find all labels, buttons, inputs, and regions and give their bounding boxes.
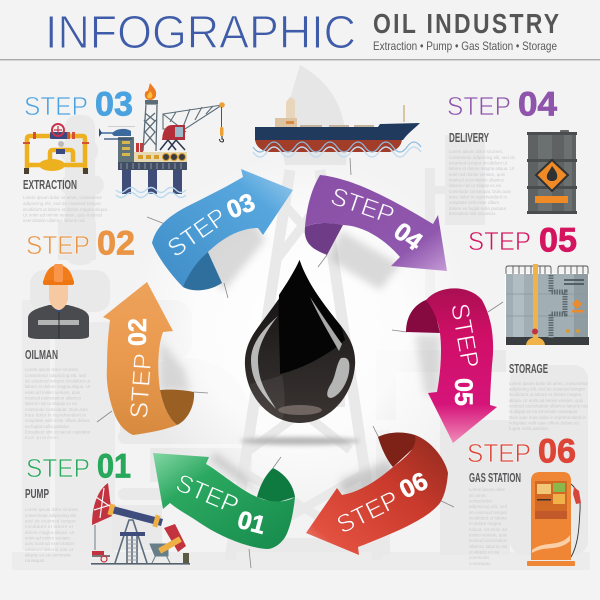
text block: gas station <box>469 487 508 566</box>
text block: pump: quis nostrud exercitation <box>25 541 75 546</box>
text block: oilman: consectetur adipiscing elit, sed <box>25 373 87 378</box>
background derrick lattice <box>230 170 378 560</box>
label: 05 <box>449 378 477 406</box>
icon: pumpjack <box>91 483 190 565</box>
text block: delivery: voluptate velit esse cillum <box>449 200 499 205</box>
text block: gas station: consequat. <box>469 561 491 566</box>
step 03 heading: STEP <box>24 91 88 121</box>
central white glow <box>125 155 475 505</box>
text block: oilman: labore et dolore magna aliqua. Ut <box>25 384 91 389</box>
text block: gas station: incididunt ut labore <box>469 516 508 520</box>
label: gas station: GAS STATION <box>469 470 521 485</box>
icon: storage tank <box>505 264 589 345</box>
step 03 heading: 03 <box>95 86 133 124</box>
label: pump: PUMP <box>25 486 49 501</box>
icon: oil barrel <box>527 130 577 214</box>
step 02 heading: 02 <box>97 224 135 262</box>
text block: gas station: adipiscing elit, sed <box>469 504 508 509</box>
text block: extraction: adipiscing elit, sed do eiusmod tempor <box>23 201 102 206</box>
text block: pump <box>25 507 79 563</box>
text block: storage: nostrud exercitation ullamco laboris nisi <box>509 404 588 408</box>
text block: oilman: do eiusmod tempor incididunt ut <box>25 378 91 384</box>
text block: pump: Lorem ipsum dolor sit amet, <box>25 507 79 512</box>
text block: extraction <box>23 195 108 223</box>
label: STEP <box>172 469 243 520</box>
text block: oilman: nostrud exercitation ullamco <box>25 396 82 400</box>
text block: pump: consequat. <box>25 558 45 563</box>
label: 01 <box>234 506 269 540</box>
text block: pump: incididunt ut labore et <box>25 524 74 529</box>
label: 06 <box>395 467 433 504</box>
text block: delivery: consectetur adipiscing elit, sed do <box>449 155 516 160</box>
text block: storage: aliqua. Ut enim ad minim veniam, quis <box>509 398 584 403</box>
title: infographic: INFOGRAPHIC <box>45 6 356 58</box>
step 04 heading: STEP <box>447 91 511 121</box>
arrow: step 03 <box>147 169 293 298</box>
text block: oilman: eu fugiat nulla pariatur. <box>25 424 70 429</box>
step 02 heading <box>26 224 135 262</box>
step 06 heading <box>467 432 576 470</box>
label: STEP <box>332 486 403 539</box>
label: 04 <box>388 217 428 256</box>
text block: pump: dolore magna aliqua. Ut <box>25 530 75 535</box>
icon: fuel pump <box>527 472 581 566</box>
arrow: step 04 <box>305 158 447 290</box>
text block: delivery <box>449 149 516 216</box>
label <box>124 318 158 419</box>
text block: delivery: Lorem ipsum dolor sit amet, <box>449 149 503 154</box>
title: oil industry: OIL INDUSTRY <box>373 9 559 40</box>
text block: storage: Lorem ipsum dolor sit amet, consectetur <box>509 381 589 386</box>
label: STEP <box>327 182 398 230</box>
oil drop <box>240 260 360 445</box>
text block: pump: aliquip ex ea commodo <box>25 552 72 558</box>
text block: gas station: minim veniam, quis <box>469 532 508 538</box>
text block: delivery: dolore eu fugiat nulla pariatur. <box>449 206 507 211</box>
text block: storage: adipiscing elit, sed do eiusmod tempor <box>509 386 586 392</box>
text block: gas station: et dolore magna <box>469 521 502 526</box>
text block: oilman: enim ad minim veniam, quis <box>25 390 81 395</box>
label: STEP <box>162 203 232 263</box>
text block: gas station: ullamco laboris nisi <box>469 544 507 549</box>
text block: delivery: Excepteur sint occaecat. <box>449 211 496 216</box>
text block: delivery: eiusmod tempor incididunt ut <box>449 160 508 166</box>
text block: delivery: irure dolor in reprehenderit in <box>449 194 508 200</box>
step 05 heading: STEP <box>468 226 531 256</box>
text block: storage: incididunt ut labore et dolore magna <box>509 392 582 397</box>
text block: storage <box>509 381 589 431</box>
panel: step 01 pump <box>25 448 190 565</box>
text block: oilman: irure dolor in reprehenderit in <box>25 412 87 418</box>
text block: gas station: ut aliquip ex ea <box>469 550 500 554</box>
text block: extraction: incididunt ut labore et dolore magna aliqua. <box>23 207 108 212</box>
step 06 heading: STEP <box>467 438 531 468</box>
text block: storage: Duis aute irure dolor in reprehenderit in <box>509 415 587 420</box>
icon: oil platform <box>99 83 225 198</box>
text block: extraction: Lorem ipsum dolor sit amet, consectetur <box>23 195 103 200</box>
step 05 heading: 05 <box>539 222 577 260</box>
label: storage: STORAGE <box>509 361 548 376</box>
panel: step 06 gas station <box>467 432 581 566</box>
panel: ship <box>253 97 421 157</box>
text block: pump: consectetur adipiscing elit, <box>25 513 77 518</box>
text block: storage: ut aliquip ex ea commodo consequat. <box>509 409 578 414</box>
text block: pump: ullamco laboris nisi ut <box>25 547 74 552</box>
panel: step 03 extraction <box>23 83 225 223</box>
text block: gas station: commodo <box>469 555 490 560</box>
step 01 heading: STEP <box>26 453 90 483</box>
text block: gas station: Lorem ipsum dolor <box>469 487 506 492</box>
text block: gas station: aliqua. Ut enim ad <box>469 527 508 532</box>
text block: gas station: do eiusmod tempor <box>469 510 508 515</box>
subtitle: Extraction • Pump • Gas Station • Storage <box>373 39 557 53</box>
text block: oilman: non proident. <box>25 435 60 440</box>
text block: pump: enim ad minim veniam, <box>25 536 71 540</box>
step 04 heading: 04 <box>518 86 557 124</box>
text block: extraction: Ut enim ad minim veniam, quis nostrud <box>23 212 103 218</box>
text block: gas station: sit amet, <box>469 493 487 498</box>
arrow: step 02 <box>97 282 208 435</box>
text block: oilman: voluptate velit esse cillum dolore <box>25 418 91 423</box>
text block: delivery: nostrud exercitation ullamco <box>449 178 505 182</box>
panel: step 04 delivery <box>447 86 577 216</box>
text block: delivery: commodo consequat. Duis aute <box>449 189 512 194</box>
label <box>332 467 433 539</box>
step 06 heading: 06 <box>538 432 576 470</box>
label: 02 <box>124 318 152 346</box>
label: delivery: DELIVERY <box>449 130 489 145</box>
text block: gas station: nostrud exercitation <box>469 538 508 543</box>
step 02 heading: STEP <box>26 230 90 260</box>
icon: oilman <box>28 264 89 339</box>
label <box>445 301 484 406</box>
label: oilman: OILMAN <box>25 348 58 362</box>
label <box>327 182 428 256</box>
text block: storage: voluptate velit esse cillum dolore eu <box>509 420 580 426</box>
label: STEP <box>445 301 484 370</box>
text block: oilman <box>25 367 91 440</box>
step 05 heading <box>468 222 577 260</box>
label <box>172 469 269 540</box>
label <box>162 188 259 263</box>
text block: delivery: labore et dolore magna aliqua. Ut <box>449 166 515 171</box>
label: 03 <box>223 188 259 225</box>
panel: step 05 storage <box>468 222 589 431</box>
arrow: step 05 <box>392 288 503 443</box>
icon: pipes <box>23 124 89 174</box>
text block: oilman: laboris nisi ut aliquip ex ea <box>25 401 78 406</box>
arrow: step 01 <box>153 452 295 568</box>
text block: pump: sed do eiusmod tempor <box>25 518 77 524</box>
step 03 heading <box>24 86 133 124</box>
text block: oilman: Excepteur sint occaecat cupidatat <box>25 430 91 434</box>
step 01 heading <box>26 448 131 486</box>
header divider <box>0 59 600 60</box>
text block: extraction: exercitation ullamco laboris nisi <box>23 218 85 223</box>
text block: oilman: commodo consequat. Duis aute <box>25 407 89 412</box>
step 04 heading <box>447 86 557 124</box>
panel: step 02 oilman <box>25 224 135 440</box>
arrow: step 06 <box>306 426 454 555</box>
text block: oilman: Lorem ipsum dolor sit amet, <box>25 367 79 372</box>
step 01 heading: 01 <box>97 448 131 486</box>
text block: delivery: enim ad minim veniam, quis <box>449 172 506 177</box>
icon: tanker ship <box>253 97 421 157</box>
label: STEP <box>125 352 158 419</box>
header <box>0 6 600 60</box>
text block: gas station: consectetur <box>469 498 493 504</box>
text block: delivery: laboris nisi ut aliquip ex ea <box>449 183 502 188</box>
text block: storage: fugiat nulla pariatur. <box>509 426 549 431</box>
label: extraction: EXTRACTION <box>23 177 77 192</box>
